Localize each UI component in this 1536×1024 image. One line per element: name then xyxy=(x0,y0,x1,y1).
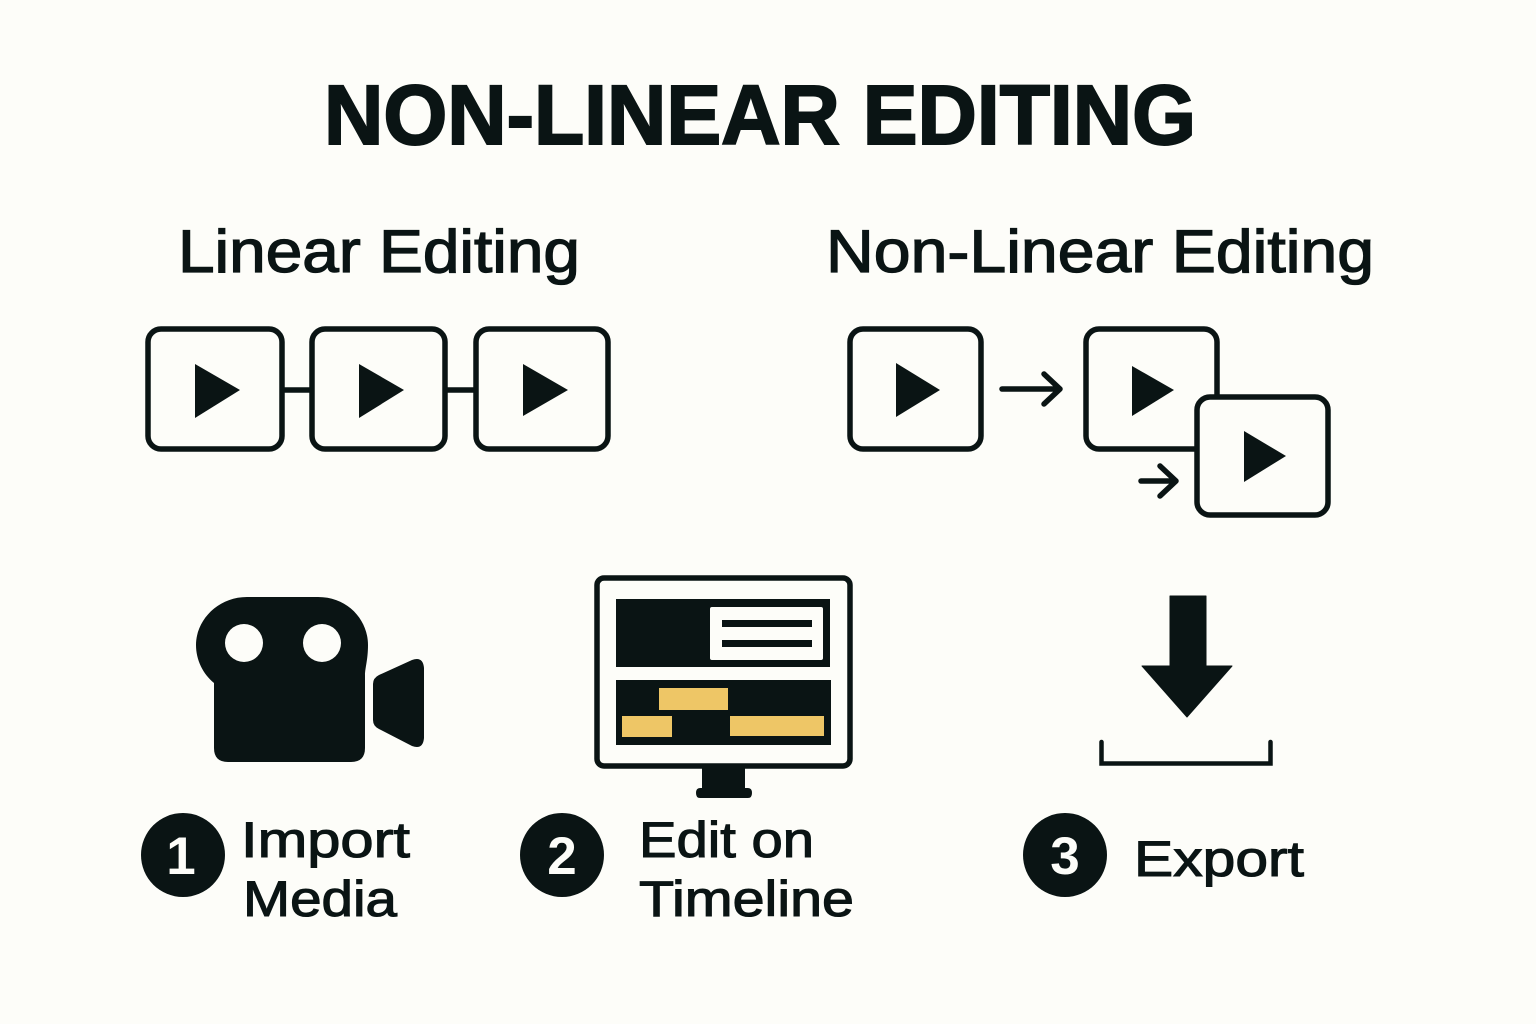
connector lines xyxy=(282,387,476,393)
label xyxy=(639,812,854,927)
preview panel xyxy=(616,599,830,667)
number badge 1: 1 xyxy=(166,827,196,886)
heading: non-linear editing: Non-Linear Editing xyxy=(826,218,1374,285)
clip 1 xyxy=(148,329,282,449)
arrow to clip 2 xyxy=(1002,374,1060,404)
heading: linear editing: Linear Editing xyxy=(178,218,580,285)
clip 3 xyxy=(476,329,608,449)
clip 2 xyxy=(1086,329,1217,449)
icon: timeline editor monitor xyxy=(597,578,850,798)
title: NON-LINEAR EDITING xyxy=(324,68,1196,162)
clip 2 xyxy=(312,329,445,449)
step 3: export xyxy=(1023,813,1304,897)
diagram: linear clip sequence xyxy=(148,329,608,449)
clip 1 xyxy=(850,329,981,449)
step 2: edit on timeline xyxy=(520,812,854,927)
icon: video camera xyxy=(196,597,424,762)
label: Import xyxy=(241,812,410,868)
number badge 2 xyxy=(520,813,604,897)
icon: export download arrow xyxy=(1102,596,1270,764)
number badge 3 xyxy=(1023,813,1107,897)
label xyxy=(241,812,410,927)
monitor stand xyxy=(696,766,752,798)
diagram: non-linear clip arrangement xyxy=(850,329,1328,515)
clip 3 xyxy=(1197,397,1328,515)
arrow to clip 3 xyxy=(1141,466,1176,496)
number badge 2: 2 xyxy=(547,827,577,886)
label: Timeline xyxy=(639,871,854,927)
label: Export xyxy=(1134,831,1304,887)
label: Media xyxy=(243,871,397,927)
timeline panel xyxy=(616,680,831,745)
step 1: import media xyxy=(141,812,410,927)
monitor frame xyxy=(597,578,850,766)
number badge 3: 3 xyxy=(1050,827,1080,886)
number badge 1 xyxy=(141,813,225,897)
label: Edit on xyxy=(639,812,814,868)
